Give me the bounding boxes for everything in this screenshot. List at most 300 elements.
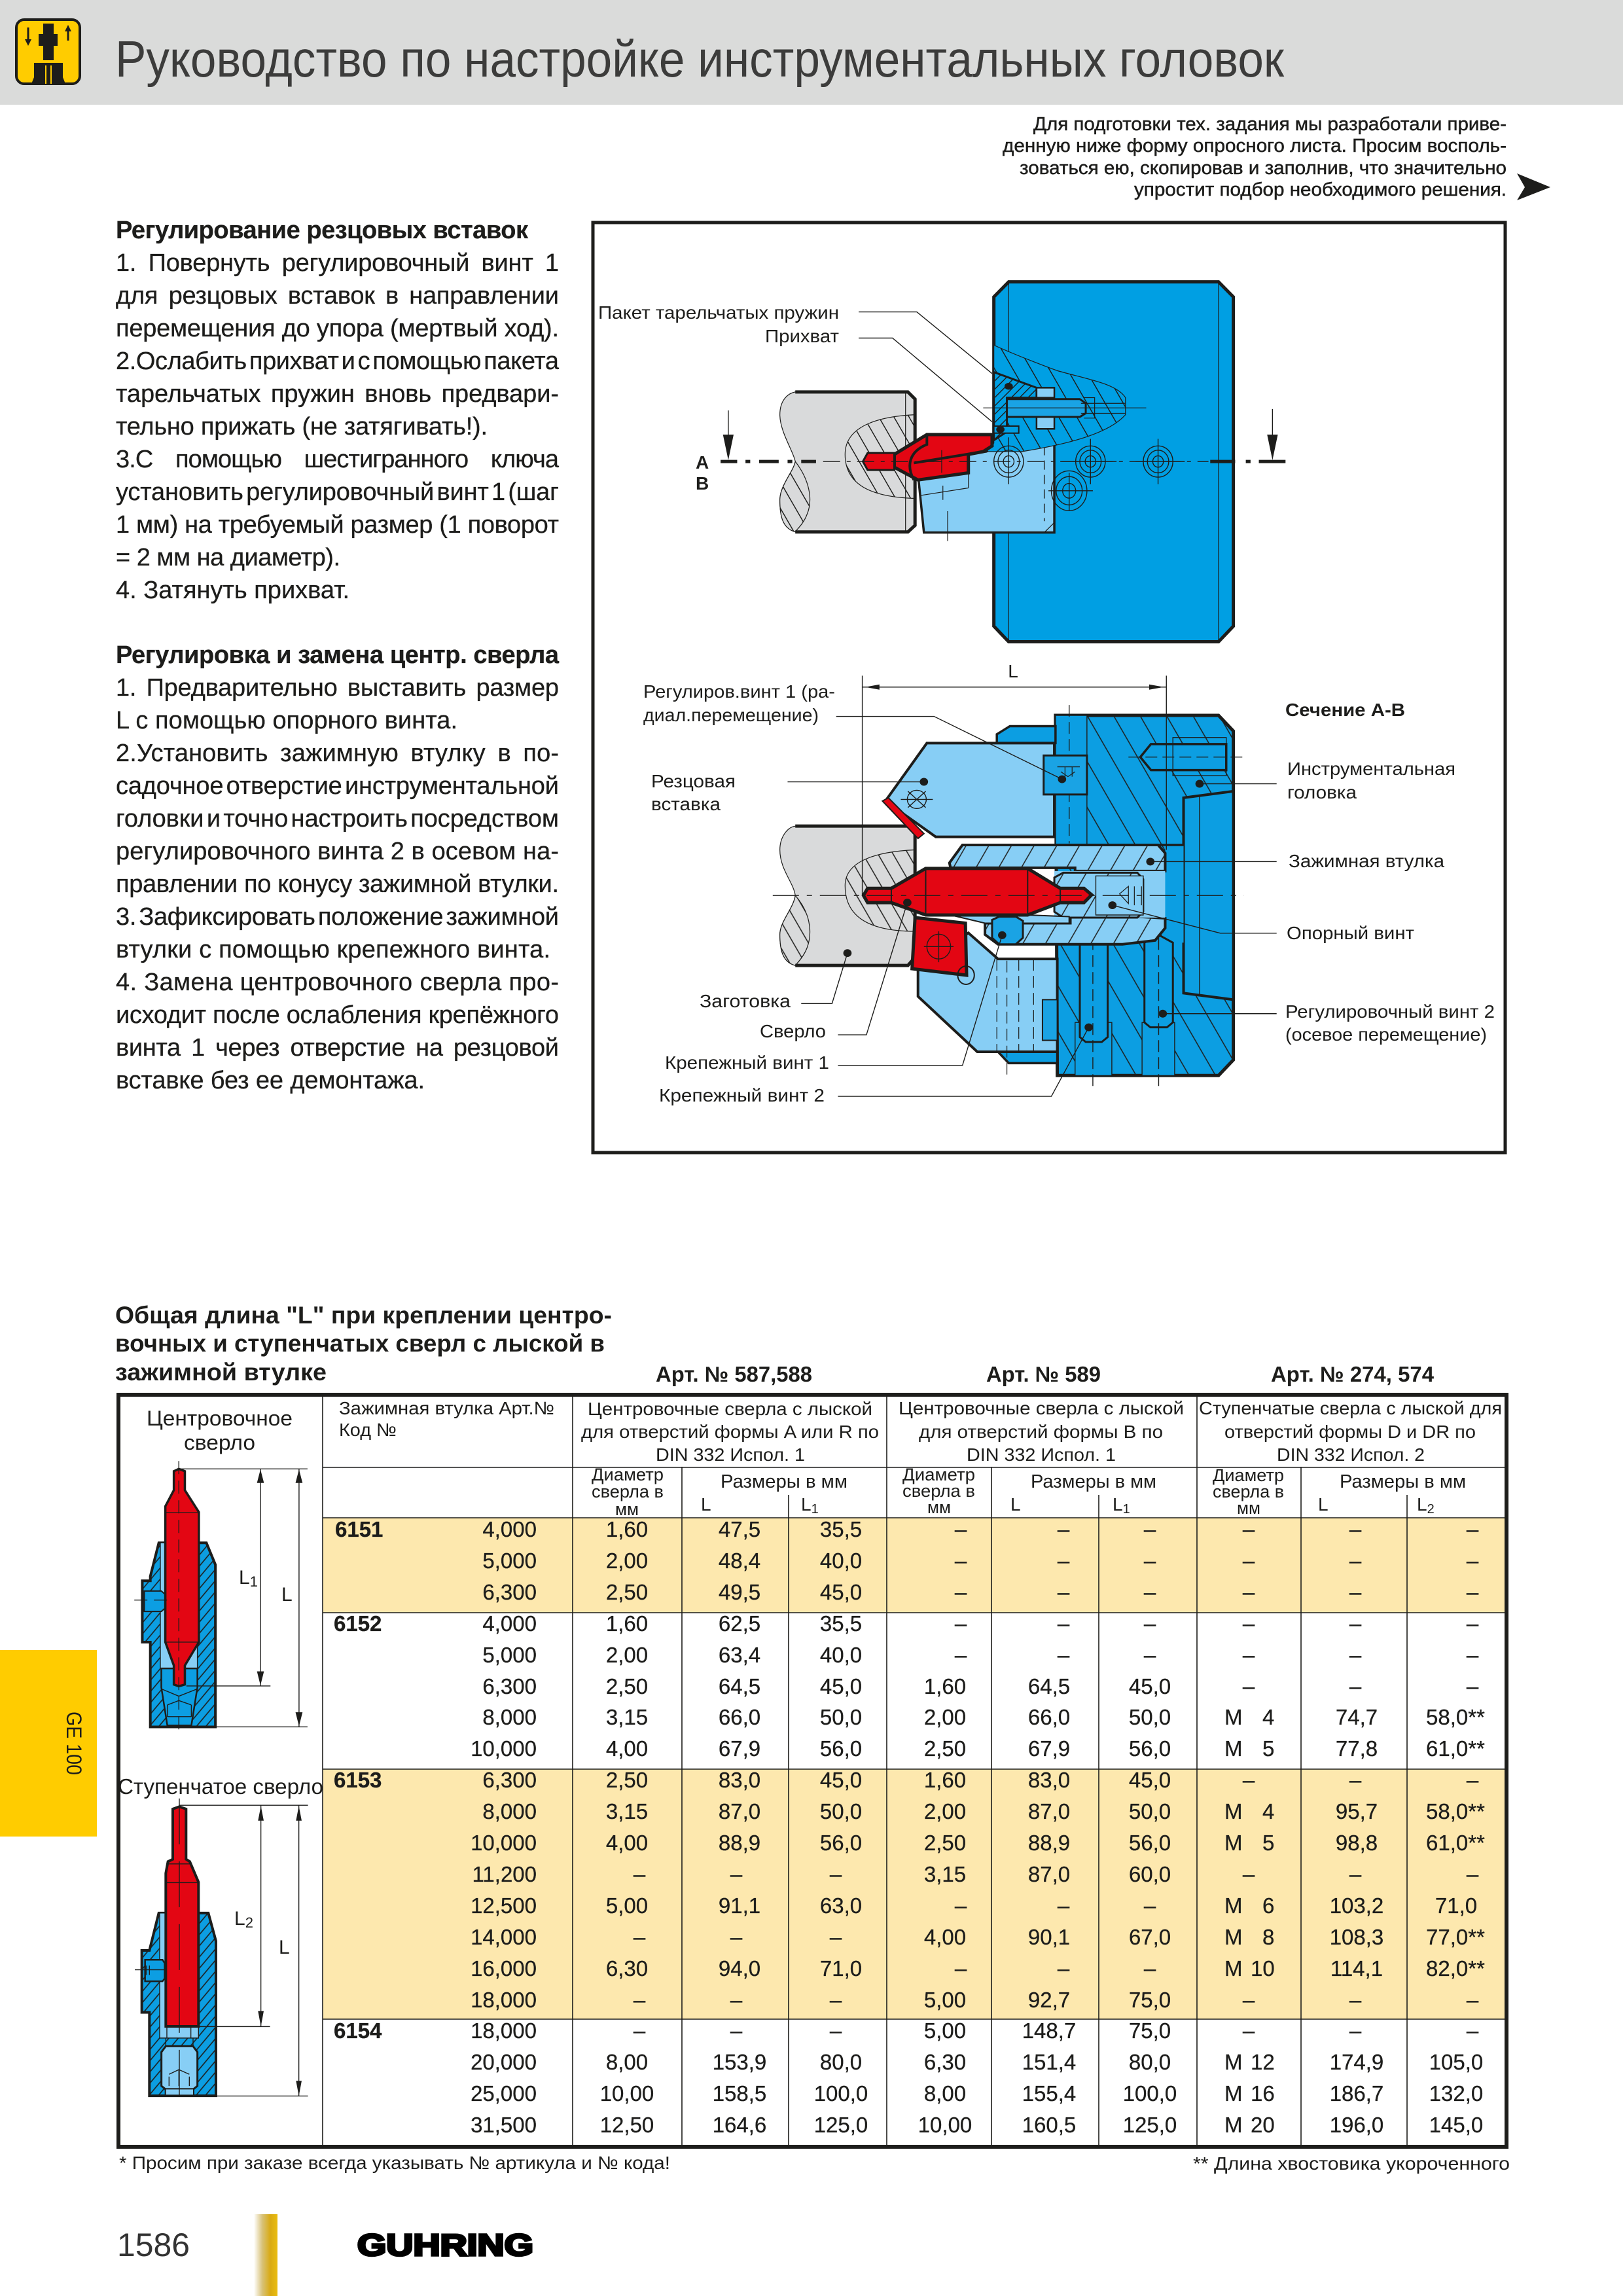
- label: clamp: Прихват: [765, 326, 839, 346]
- sub headers: мм: [927, 1498, 951, 1517]
- column headers: Код №: [339, 1420, 397, 1440]
- drawing: centre drill in sleeve: [134, 1461, 308, 1734]
- steps: drill replacement: [116, 674, 559, 1094]
- upper cutting insert: [882, 743, 1087, 838]
- intro note: денную ниже форму опросного листа. Просим восполь-: [1003, 135, 1507, 156]
- row 6153 6,300: –: [1467, 1768, 1479, 1792]
- row 6153 8,000: [482, 1799, 1485, 1823]
- sub headers: L: [1318, 1494, 1329, 1515]
- row 6153 10,000: 56,0: [1129, 1831, 1171, 1855]
- intro note: [1003, 114, 1507, 200]
- screw circles: [994, 437, 1185, 511]
- row 6152 4,000: –: [1144, 1611, 1156, 1636]
- red drill: [166, 1469, 199, 1686]
- page number: 1586: [117, 2227, 190, 2263]
- row 6154 20,000: 151,4: [1022, 2050, 1076, 2074]
- row 6154 20,000: 8,00: [606, 2050, 648, 2074]
- centre line: [773, 895, 1244, 896]
- row 6151 4,000: –: [955, 1517, 967, 1541]
- row 6154 18,000: 75,0: [1129, 2018, 1171, 2043]
- row 6154 25,000: 8,00: [924, 2081, 966, 2106]
- row 6151 5,000: 5,000: [482, 1549, 537, 1573]
- column headers: Центровочные сверла с лыской: [588, 1399, 872, 1419]
- row 6154 20,000: 80,0: [1129, 2050, 1171, 2074]
- column headers: отверстий формы D и DR по: [1224, 1422, 1476, 1442]
- row 6152 10,000: 61,0**: [1426, 1736, 1485, 1761]
- row 6153 14,000: –: [730, 1925, 743, 1949]
- dimensions: [179, 1469, 308, 1727]
- column headers: Центровочное: [147, 1407, 293, 1430]
- row 6153 8,000: 87,0: [1028, 1799, 1070, 1823]
- row 6151 4,000: –: [1467, 1517, 1479, 1541]
- sub headers: 1: [1123, 1502, 1130, 1516]
- row 6154 18,000: –: [1349, 2018, 1362, 2043]
- row 6152 6,300: 1,60: [924, 1674, 966, 1698]
- side tab: GE 100: GE 100: [62, 1712, 86, 1775]
- row 6153 18,000: 75,0: [1129, 1988, 1171, 2012]
- row 6151 4,000: 4,000: [482, 1517, 537, 1541]
- labels: centre drill dimensions: 1: [250, 1573, 258, 1590]
- light blue insert: [919, 429, 1054, 541]
- labels: section A-B: Сечение А-В: [1285, 700, 1405, 720]
- row 6153 18,000: [471, 1988, 1479, 2012]
- row 6151 4,000: –: [1349, 1517, 1362, 1541]
- row 6153 12,500: 91,1: [719, 1893, 760, 1918]
- row 6153 11,200: 60,0: [1129, 1862, 1171, 1886]
- labels: section A-B: Крепежный винт 2: [659, 1085, 825, 1105]
- row 6152 5,000: –: [1349, 1643, 1362, 1667]
- steps: insert adjustment: для резцовых вставок в направлении: [116, 282, 559, 310]
- label: spring pack: Пакет тарельчатых пружин: [598, 302, 839, 323]
- labels: centre drill dimensions: L: [239, 1567, 250, 1588]
- labels: section A-B: [643, 661, 1495, 1105]
- article numbers: Арт. № 589: [986, 1362, 1101, 1386]
- row 6151 6,300: 45,0: [820, 1580, 862, 1604]
- sub headers: 2: [1427, 1502, 1435, 1516]
- heading: table title: зажимной втулке: [115, 1359, 327, 1386]
- column headers: для отверстий формы B по: [919, 1422, 1163, 1442]
- row 6153 8,000: 2,00: [924, 1799, 966, 1823]
- row 6152 4,000: –: [1243, 1611, 1255, 1636]
- row 6153 8,000: 50,0: [820, 1799, 862, 1823]
- row 6151 5,000: –: [1144, 1549, 1156, 1573]
- panel: assembly diagrams: [593, 223, 1505, 1153]
- row 6153 10,000: 61,0**: [1426, 1831, 1485, 1855]
- row 6151 4,000: –: [1144, 1517, 1156, 1541]
- heading: table title: Общая длина "L" при креплении центро-: [115, 1302, 612, 1329]
- row 6153 10,000: [471, 1831, 1485, 1855]
- text block: instructions: [116, 217, 560, 1094]
- steps: insert adjustment: 2.Ослабить прихват и с помощью пакета: [116, 348, 560, 375]
- row 6151 6,300: –: [1058, 1580, 1070, 1604]
- row 6153 6,300: 6,300: [482, 1768, 537, 1792]
- sub headers: L: [801, 1494, 812, 1515]
- row 6152 4,000: 35,5: [820, 1611, 862, 1636]
- column headers: DIN 332 Испол. 1: [967, 1444, 1116, 1465]
- row 6151 6,300: –: [1349, 1580, 1362, 1604]
- column headers: сверло: [184, 1431, 255, 1454]
- row 6153 14,000: 14,000: [471, 1925, 537, 1949]
- labels: section A-B: Регулиров.винт 1 (ра-: [643, 681, 835, 702]
- row 6153 6,300: –: [1243, 1768, 1255, 1792]
- row 6154 18,000: –: [830, 2018, 842, 2043]
- steps: drill replacement: 3. Зафиксировать положение зажимной: [116, 903, 559, 931]
- row 6153 6,300: 83,0: [719, 1768, 760, 1792]
- labels: section A-B: вставка: [651, 794, 721, 814]
- row 6153 10,000: 98,8: [1336, 1831, 1378, 1855]
- row 6151 6,300: –: [1243, 1580, 1255, 1604]
- article numbers: [656, 1362, 1435, 1386]
- row 6154 31,500: 31,500: [471, 2113, 537, 2137]
- row 6153 8,000: 50,0: [1129, 1799, 1171, 1823]
- row 6152 5,000: –: [1144, 1643, 1156, 1667]
- row 6153 12,500: –: [1058, 1893, 1070, 1918]
- column headers: для отверстий формы A или R по: [581, 1422, 879, 1442]
- row 6153 10,000: 88,9: [1028, 1831, 1070, 1855]
- row 6152 8,000: 50,0: [820, 1705, 862, 1729]
- row 6154 25,000: 155,4: [1022, 2081, 1076, 2106]
- row 6152 4,000: 4,000: [482, 1611, 537, 1636]
- sleeve: [142, 1543, 215, 1727]
- row 6152 5,000: –: [1467, 1643, 1479, 1667]
- labels: stepped drill dimensions: L: [279, 1937, 290, 1958]
- row 6153 11,200: –: [1243, 1862, 1255, 1886]
- row 6153 18,000: –: [830, 1988, 842, 2012]
- row 6151 4,000: –: [1058, 1517, 1070, 1541]
- blue strips: [997, 726, 1058, 1063]
- article numbers: Арт. № 274, 574: [1271, 1362, 1435, 1386]
- column headers: Ступенчатые сверла с лыской для: [1199, 1398, 1502, 1418]
- row 6153 14,000: [471, 1925, 1485, 1949]
- workpiece: [780, 826, 915, 965]
- row 6153 16,000: 114,1: [1330, 1956, 1383, 1981]
- side tab: GE 100: [0, 1650, 97, 1837]
- labels: stepped drill dimensions: [234, 1908, 290, 1958]
- row 6153 11,200: –: [1467, 1862, 1479, 1886]
- labels: section A-B: Резцовая: [651, 771, 736, 791]
- row 6152 4,000: 6152: [334, 1611, 382, 1636]
- row 6153 11,200: –: [633, 1862, 646, 1886]
- row 6151 5,000: –: [955, 1549, 967, 1573]
- steps: drill replacement: 1. Предварительно выставить размер: [116, 674, 559, 702]
- row 6154 18,000: –: [1467, 2018, 1479, 2043]
- red stepped drill: [166, 1806, 198, 2026]
- row 6153 12,500: –: [955, 1893, 967, 1918]
- sleeve bore: [160, 1543, 198, 1668]
- row 6153 12,500: M: [1224, 1893, 1242, 1918]
- row 6153 14,000: 8: [1262, 1925, 1274, 1949]
- label: section A: A: [696, 452, 709, 473]
- row 6151 4,000: [335, 1517, 1479, 1541]
- row 6153 10,000: 88,9: [719, 1831, 760, 1855]
- row 6153 6,300: [334, 1768, 1479, 1792]
- column headers: [147, 1398, 1502, 1465]
- steps: drill replacement: 2.Установить зажимную втулку в по-: [116, 740, 559, 767]
- column headers: Центровочные сверла с лыской: [899, 1398, 1184, 1418]
- arrow: pointer right: [1517, 173, 1550, 200]
- row 6152 4,000: –: [955, 1611, 967, 1636]
- row 6152 8,000: 74,7: [1336, 1705, 1378, 1729]
- row 6151 6,300: –: [955, 1580, 967, 1604]
- row 6151 4,000: 35,5: [820, 1517, 862, 1541]
- row 6152 6,300: 45,0: [1129, 1674, 1171, 1698]
- row 6154 20,000: M: [1224, 2050, 1242, 2074]
- clamp screw: [145, 1960, 165, 1981]
- steps: insert adjustment: [116, 249, 560, 604]
- row 6151 5,000: –: [1467, 1549, 1479, 1573]
- row 6153 11,200: [473, 1862, 1479, 1886]
- row 6153 16,000: –: [955, 1956, 967, 1981]
- clamping sleeve: [950, 845, 1165, 944]
- row 6152 8,000: [482, 1705, 1485, 1729]
- row 6154 31,500: 125,0: [814, 2113, 868, 2137]
- row 6152 10,000: 67,9: [1028, 1736, 1070, 1761]
- row 6154 20,000: 174,9: [1330, 2050, 1383, 2074]
- row 6152 8,000: 66,0: [719, 1705, 760, 1729]
- section line A-B: [721, 409, 1285, 461]
- row 6154 31,500: 196,0: [1330, 2113, 1383, 2137]
- sub headers: сверла в: [902, 1481, 975, 1501]
- row 6152 4,000: –: [1349, 1611, 1362, 1636]
- sub headers: Диаметр: [1213, 1465, 1284, 1485]
- row 6152 6,300: –: [1243, 1674, 1255, 1698]
- row 6154 18,000: –: [1243, 2018, 1255, 2043]
- intro note: Для подготовки тех. задания мы разработали приве-: [1033, 114, 1507, 135]
- row 6153 16,000: 71,0: [820, 1956, 862, 1981]
- sub headers: L: [1113, 1494, 1123, 1515]
- row 6153 12,500: 12,500: [471, 1893, 537, 1918]
- row 6153 11,200: 11,200: [473, 1862, 537, 1886]
- row 6154 31,500: 145,0: [1429, 2113, 1483, 2137]
- row 6153 12,500: [471, 1893, 1477, 1918]
- row 6154 18,000: –: [633, 2018, 646, 2043]
- grid lines: [323, 1394, 1507, 2147]
- row 6152 6,300: 64,5: [1028, 1674, 1070, 1698]
- sub headers: [592, 1465, 1466, 1519]
- drawing: stepped drill in sleeve: [135, 1799, 308, 2104]
- row 6153 8,000: 95,7: [1336, 1799, 1378, 1823]
- row 6153 8,000: 3,15: [606, 1799, 648, 1823]
- row 6152 8,000: M: [1224, 1705, 1242, 1729]
- sub headers: L: [1010, 1494, 1021, 1515]
- row 6154 18,000: 5,00: [924, 2018, 966, 2043]
- column headers: Зажимная втулка Арт.№: [339, 1398, 554, 1418]
- row 6154 18,000: –: [730, 2018, 743, 2043]
- row 6152 5,000: –: [1058, 1643, 1070, 1667]
- row 6152 4,000: 1,60: [606, 1611, 648, 1636]
- footer gold bar: [254, 2214, 277, 2296]
- row 6153 14,000: 108,3: [1330, 1925, 1383, 1949]
- row 6151 5,000: 2,00: [606, 1549, 648, 1573]
- row 6153 6,300: –: [1349, 1768, 1362, 1792]
- icon: tool head: [16, 20, 80, 84]
- row 6151 6,300: 49,5: [719, 1580, 760, 1604]
- row 6151 6,300: 2,50: [606, 1580, 648, 1604]
- row 6154 31,500: 160,5: [1022, 2113, 1076, 2137]
- row 6154 31,500: M: [1224, 2113, 1242, 2137]
- row 6153 8,000: M: [1224, 1799, 1242, 1823]
- row 6151 6,300: –: [1144, 1580, 1156, 1604]
- steps: drill replacement: L с помощью опорного винта.: [116, 707, 457, 734]
- row 6152 8,000: 3,15: [606, 1705, 648, 1729]
- red cutting insert and drill: [863, 435, 992, 480]
- clamp screw: [144, 1591, 166, 1611]
- intro note: упростит подбор необходимого решения.: [1134, 179, 1507, 200]
- sub headers: Размеры в мм: [721, 1471, 847, 1492]
- diagram: front view: [721, 282, 1285, 642]
- intro note: зоваться ею, скопировав и заполнив, что значительно: [1020, 158, 1507, 179]
- row 6153 6,300: 45,0: [1129, 1768, 1171, 1792]
- steps: insert adjustment: 1. Повернуть регулировочный винт 1: [116, 249, 559, 277]
- row 6153 6,300: 2,50: [606, 1768, 648, 1792]
- sub headers: Диаметр: [592, 1465, 664, 1484]
- row 6154 31,500: 20: [1251, 2113, 1275, 2137]
- row 6152 5,000: 5,000: [482, 1643, 537, 1667]
- row 6153 14,000: 77,0**: [1426, 1925, 1485, 1949]
- steps: drill replacement: садочное отверстие инструментальной: [116, 772, 559, 800]
- row 6152 10,000: 10,000: [471, 1736, 537, 1761]
- row 6153 8,000: 58,0**: [1426, 1799, 1485, 1823]
- title: Руководство по настройке инструментальных головок: [115, 30, 1285, 88]
- row 6151 4,000: 47,5: [719, 1517, 760, 1541]
- hatched section: [983, 345, 1146, 452]
- labels: stepped drill dimensions: L: [234, 1908, 245, 1929]
- row 6154 20,000: [471, 2050, 1483, 2074]
- row 6152 4,000: –: [1467, 1611, 1479, 1636]
- row 6153 16,000: M: [1224, 1956, 1242, 1981]
- row 6154 31,500: 125,0: [1123, 2113, 1177, 2137]
- row 6153 10,000: 10,000: [471, 1831, 537, 1855]
- row 6153 14,000: 67,0: [1129, 1925, 1171, 1949]
- column headers: DIN 332 Испол. 2: [1277, 1444, 1425, 1465]
- row 6153 8,000: 8,000: [482, 1799, 537, 1823]
- row 6154 31,500: [471, 2113, 1483, 2137]
- row 6152 6,300: –: [1467, 1674, 1479, 1698]
- row 6152 4,000: –: [1058, 1611, 1070, 1636]
- row 6153 16,000: [471, 1956, 1485, 1981]
- row 6153 18,000: 92,7: [1028, 1988, 1070, 2012]
- row 6154 31,500: 12,50: [600, 2113, 654, 2137]
- row 6152 6,300: 64,5: [719, 1674, 760, 1698]
- row 6153 11,200: –: [830, 1862, 842, 1886]
- sub headers: сверла в: [1213, 1482, 1284, 1501]
- steps: insert adjustment: установить регулировочный винт 1 (шаг: [116, 478, 559, 506]
- steps: insert adjustment: 3.С помощью шестигранного ключа: [116, 446, 560, 473]
- sleeve: [142, 1913, 216, 2096]
- row 6153 12,500: 6: [1262, 1893, 1274, 1918]
- steps: drill replacement: исходит после ослабления крепёжного: [116, 1001, 559, 1029]
- labels: section A-B: Регулировочный винт 2: [1285, 1001, 1495, 1022]
- row 6153 12,500: 71,0: [1435, 1893, 1477, 1918]
- labels: section A-B: диал.перемещение): [643, 705, 819, 725]
- row 6152 6,300: 45,0: [820, 1674, 862, 1698]
- row 6154 20,000: 105,0: [1429, 2050, 1483, 2074]
- steps: insert adjustment: = 2 мм на диаметр).: [116, 544, 340, 571]
- row 6153 12,500: 103,2: [1330, 1893, 1383, 1918]
- row 6154 20,000: 20,000: [471, 2050, 537, 2074]
- centre drill: [863, 869, 1092, 915]
- row 6152 8,000: 4: [1262, 1705, 1274, 1729]
- labels: section A-B: Опорный винт: [1287, 923, 1414, 943]
- row 6151 4,000: 1,60: [606, 1517, 648, 1541]
- row 6154 25,000: 16: [1251, 2081, 1275, 2106]
- row 6152 10,000: 56,0: [820, 1736, 862, 1761]
- row 6153 10,000: 5: [1262, 1831, 1274, 1855]
- row 6153 10,000: 56,0: [820, 1831, 862, 1855]
- heading: insert adjustment: Регулирование резцовых вставок: [116, 217, 529, 244]
- row 6152 10,000: 4,00: [606, 1736, 648, 1761]
- footnote: short shank: ** Длина хвостовика укороченного: [1193, 2153, 1510, 2174]
- row 6153 14,000: –: [633, 1925, 646, 1949]
- sub headers: 1: [812, 1502, 819, 1516]
- lower insert: [918, 933, 1058, 1075]
- row 6154 25,000: 158,5: [713, 2081, 766, 2106]
- footnote: order note: * Просим при заказе всегда указывать № артикула и № кода!: [119, 2153, 670, 2173]
- labels: section A-B: Зажимная втулка: [1289, 851, 1444, 871]
- row 6153 14,000: M: [1224, 1925, 1242, 1949]
- row 6151 6,300: 6,300: [482, 1580, 537, 1604]
- table: clamping sleeves: [118, 1394, 1507, 2147]
- row 6153 14,000: 90,1: [1028, 1925, 1070, 1949]
- row 6151 5,000: 40,0: [820, 1549, 862, 1573]
- heading: table title: вочных и ступенчатых сверл с лыской в: [115, 1330, 605, 1357]
- row 6152 6,300: [482, 1674, 1479, 1698]
- row 6154 18,000: [334, 2018, 1479, 2043]
- steps: drill replacement: вставке без ее демонтажа.: [116, 1067, 425, 1094]
- label: stepped drill: Ступенчатое сверло: [118, 1774, 323, 1799]
- row 6153 11,200: 3,15: [924, 1862, 966, 1886]
- row 6153 10,000: M: [1224, 1831, 1242, 1855]
- row 6152 5,000: 63,4: [719, 1643, 760, 1667]
- row 6154 25,000: 25,000: [471, 2081, 537, 2106]
- labels: stepped drill dimensions: 2: [245, 1914, 253, 1931]
- row 6153 16,000: 82,0**: [1426, 1956, 1485, 1981]
- row 6152 5,000: [482, 1643, 1479, 1667]
- row 6153 18,000: 18,000: [471, 1988, 537, 2012]
- dimension L: [863, 675, 1166, 895]
- row 6151 5,000: [482, 1549, 1479, 1573]
- row 6152 8,000: 66,0: [1028, 1705, 1070, 1729]
- row 6153 16,000: 6,30: [606, 1956, 648, 1981]
- steps: drill replacement: 4. Замена центровочного сверла про-: [116, 969, 559, 996]
- row 6153 6,300: 6153: [334, 1768, 382, 1792]
- row 6153 6,300: 83,0: [1028, 1768, 1070, 1792]
- labels: section A-B: (осевое перемещение): [1285, 1024, 1487, 1045]
- label: section B: B: [696, 473, 709, 493]
- sub headers: Размеры в мм: [1031, 1471, 1156, 1492]
- row 6151 5,000: –: [1058, 1549, 1070, 1573]
- row 6153 18,000: –: [1243, 1988, 1255, 2012]
- row 6153 12,500: –: [1144, 1893, 1156, 1918]
- labels: section A-B: L: [1008, 661, 1018, 681]
- row 6152 4,000: [334, 1611, 1479, 1636]
- row 6151 5,000: –: [1243, 1549, 1255, 1573]
- row 6154 25,000: 100,0: [1123, 2081, 1177, 2106]
- labels: section A-B: Крепежный винт 1: [665, 1052, 829, 1073]
- sub headers: сверла в: [592, 1482, 664, 1501]
- row 6152 10,000: [471, 1736, 1485, 1761]
- steps: drill replacement: головки и точно настроить посредством: [116, 805, 559, 833]
- labels: section A-B: головка: [1287, 782, 1357, 802]
- row 6153 11,200: 87,0: [1028, 1862, 1070, 1886]
- row 6154 31,500: 10,00: [918, 2113, 972, 2137]
- row 6152 8,000: 2,00: [924, 1705, 966, 1729]
- dimensions: [179, 1805, 308, 2096]
- row 6152 5,000: –: [1243, 1643, 1255, 1667]
- sub headers: мм: [1237, 1498, 1260, 1518]
- row 6151 5,000: –: [1349, 1549, 1362, 1573]
- row 6153 11,200: –: [730, 1862, 743, 1886]
